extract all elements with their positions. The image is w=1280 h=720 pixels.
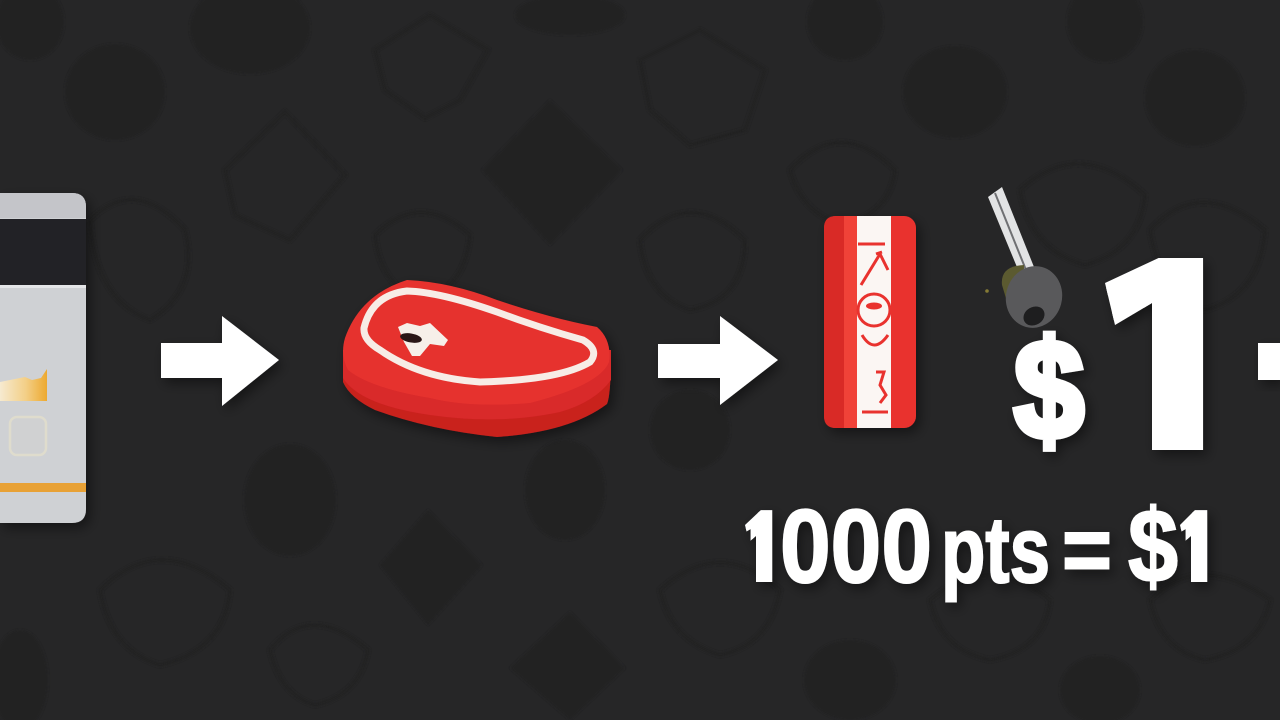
big value: $1: $ (1014, 311, 1084, 468)
arrow 1 (161, 316, 279, 406)
arrow 3 (1258, 343, 1280, 380)
conversion caption: $ (1128, 489, 1178, 605)
icon: car key (985, 187, 1069, 334)
big value: $1: 1 (1056, 193, 1264, 562)
conversion caption: = (1062, 497, 1112, 602)
conversion caption: pts (941, 497, 1050, 602)
key ring (1002, 265, 1024, 305)
icon: credit card (0, 193, 86, 523)
icon: gold crown on card (0, 369, 47, 401)
conversion caption (745, 504, 1212, 604)
arrow 2 (658, 316, 778, 405)
steak fat ring (364, 291, 594, 382)
conversion caption: 000 (780, 489, 932, 605)
icon: card chip (10, 417, 46, 455)
steak bone (398, 323, 448, 356)
bill markings (858, 244, 890, 412)
icon: red steak (343, 280, 611, 437)
conversion caption: 1 (721, 484, 796, 626)
conversion caption: 1 (1156, 484, 1231, 626)
icon: dollar bill (824, 216, 916, 428)
key blade (988, 187, 1034, 272)
key head (999, 260, 1069, 334)
big value: $1 (1012, 258, 1208, 455)
